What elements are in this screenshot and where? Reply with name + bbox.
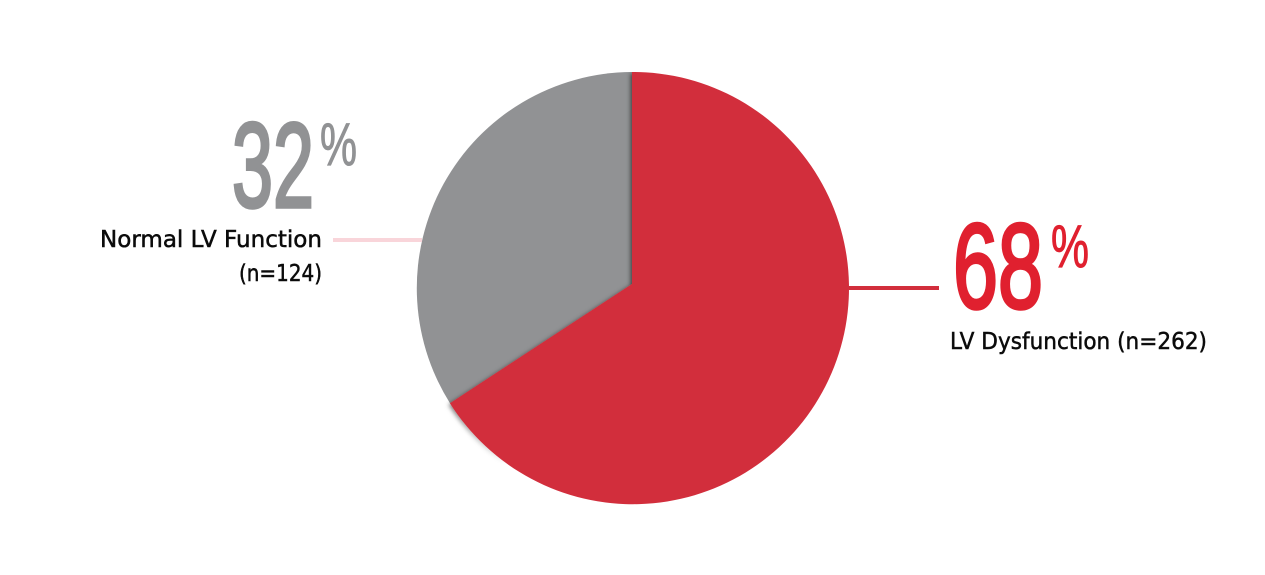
label: LV dysfunction n=262: LV Dysfunction (n=262) — [950, 329, 1207, 355]
label: n=124: (n=124) — [239, 261, 322, 287]
pie slice: normal LV function 32% — [417, 72, 632, 403]
percent sign: % — [1051, 213, 1089, 280]
pie chart — [417, 72, 849, 504]
value: 32: 32 — [232, 97, 314, 233]
callout: 68% LV dysfunction — [849, 198, 1207, 355]
percent sign: % — [320, 111, 357, 178]
leader line — [849, 286, 939, 290]
value: 68: 68 — [953, 198, 1043, 334]
pie slice: LV dysfunction 68% — [450, 72, 849, 504]
leader line — [333, 238, 422, 242]
label: normal LV function: Normal LV Function — [100, 227, 322, 253]
callout: 32% normal LV function — [100, 97, 422, 287]
